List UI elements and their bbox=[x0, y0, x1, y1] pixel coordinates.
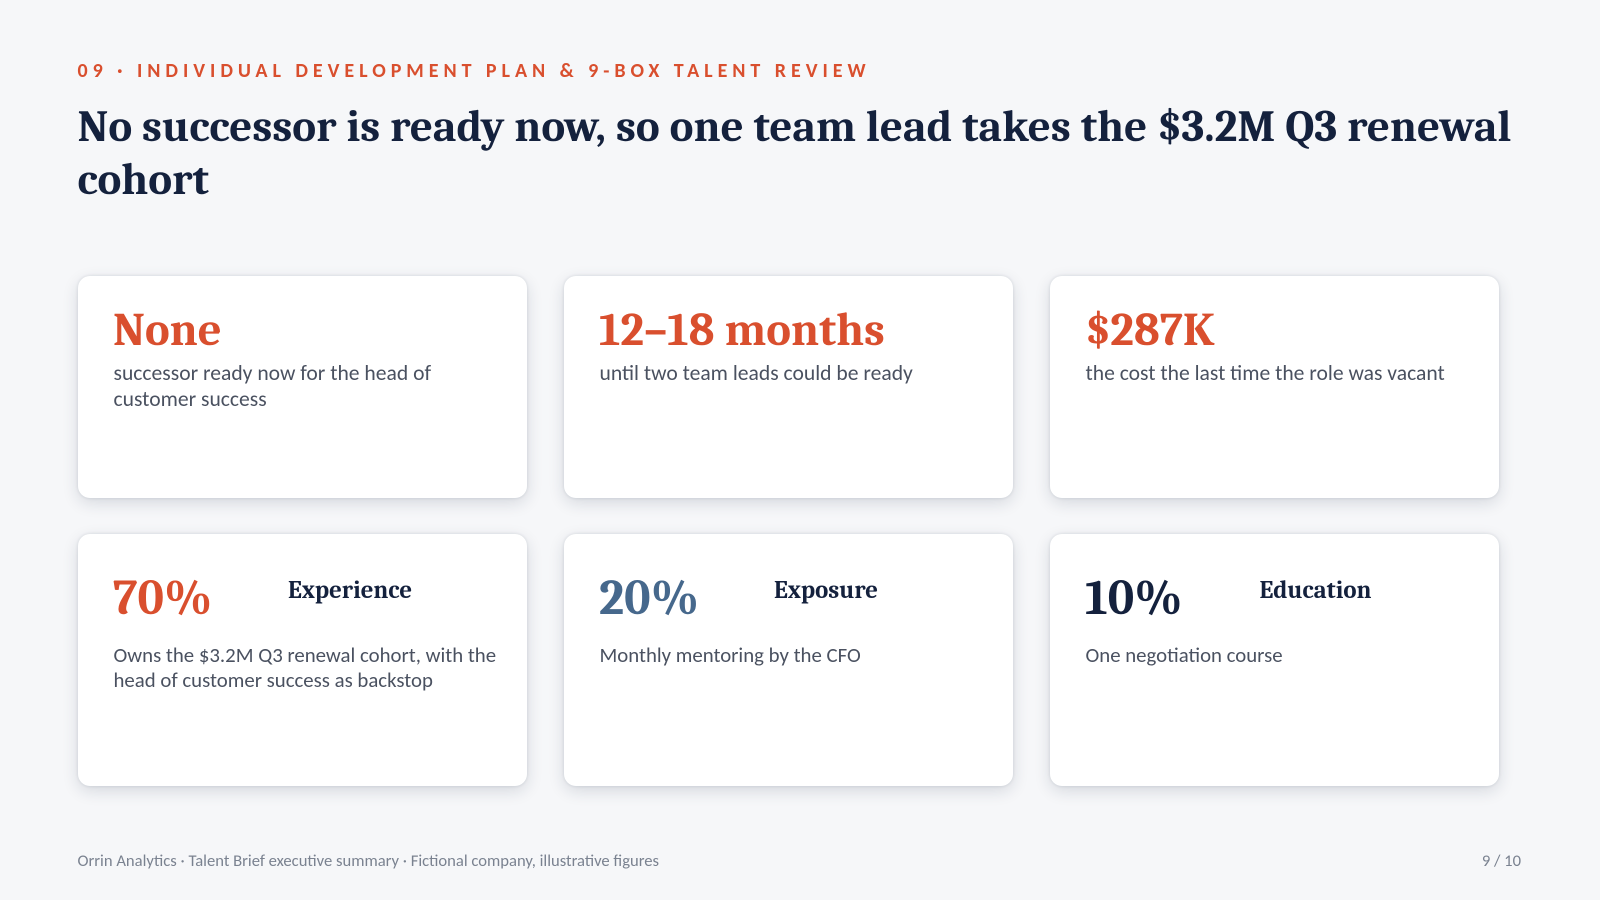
description: Monthly mentoring by the CFO bbox=[600, 642, 861, 668]
description bbox=[114, 642, 496, 693]
panel: exposure bbox=[564, 534, 1013, 786]
stat description: until two team leads could be ready bbox=[600, 358, 913, 386]
percentage: 70% bbox=[113, 570, 212, 627]
stat value: None bbox=[113, 302, 222, 356]
page number: 9 / 10 bbox=[1482, 851, 1521, 871]
percentage: 10% bbox=[1085, 570, 1183, 627]
title: cohort bbox=[78, 154, 209, 206]
title bbox=[78, 102, 1511, 206]
stat description: the cost the last time the role was vacant bbox=[1086, 358, 1445, 386]
title: No successor is ready now, so one team lead takes the $3.2M Q3 renewal bbox=[78, 102, 1511, 152]
heading: Exposure bbox=[774, 576, 878, 604]
panel: experience bbox=[78, 534, 527, 786]
stat value: $287K bbox=[1085, 302, 1215, 356]
stat description: successor ready now for the head of bbox=[114, 358, 431, 386]
description: Owns the $3.2M Q3 renewal cohort, with the bbox=[114, 642, 496, 668]
stat description bbox=[114, 358, 431, 412]
heading: Education bbox=[1260, 576, 1371, 604]
stat value: 12–18 months bbox=[599, 302, 885, 356]
panel: no successor bbox=[78, 276, 527, 498]
eyebrow: 09 · INDIVIDUAL DEVELOPMENT PLAN & 9-BOX TALENT REVIEW bbox=[78, 59, 871, 83]
panel: education bbox=[1050, 534, 1499, 786]
heading: Experience bbox=[288, 576, 412, 604]
footer source note: Orrin Analytics · Talent Brief executive summary · Fictional company, illustrative figures bbox=[78, 851, 659, 871]
description: head of customer success as backstop bbox=[114, 667, 433, 693]
description: One negotiation course bbox=[1086, 642, 1283, 668]
stat description: customer success bbox=[114, 384, 267, 412]
panel: vacancy cost bbox=[1050, 276, 1499, 498]
percentage: 20% bbox=[599, 570, 699, 627]
panel: time to readiness bbox=[564, 276, 1013, 498]
